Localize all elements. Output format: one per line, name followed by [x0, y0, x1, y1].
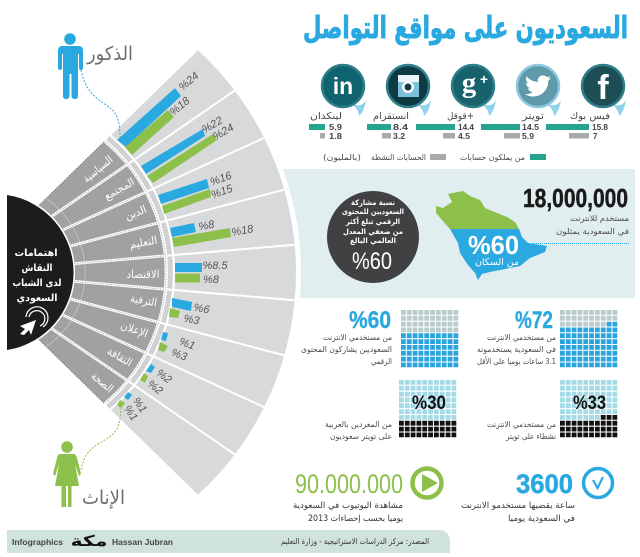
icon: google plus: [452, 65, 496, 116]
account bars: 3.2: [393, 132, 406, 141]
callout: digital content share: العالمي البالغ: [350, 236, 396, 245]
black hub: النقاش: [22, 263, 52, 274]
callout: digital content share: السعوديين للمحتوى: [342, 207, 404, 216]
stat: 30 percent: [325, 382, 457, 441]
account bars: 8.4: [393, 123, 409, 132]
female bars: [117, 110, 231, 408]
black hub: اهتمامات: [14, 248, 58, 259]
stat: 72 percent: من مستخدمي الانترنت: [487, 333, 556, 342]
percentage labels: %2: [154, 367, 174, 386]
stat: 72 percent: %72: [515, 307, 553, 334]
icon: facebook: [582, 65, 626, 116]
stat: 33 percent: نشطاء على تويتر: [505, 432, 556, 441]
callout: digital content share: من ضعفي المعدل: [343, 227, 403, 236]
percentage labels: %3: [170, 347, 189, 364]
stat: 60 percent: السعوديين يشاركون المحتوى: [301, 345, 392, 354]
icon: instagram: [387, 65, 431, 116]
category labels: الدين: [123, 203, 148, 223]
waffle chart 33: [560, 382, 618, 435]
waffle chart 60: [401, 312, 459, 365]
account bars: 14.5: [522, 123, 540, 132]
stat: hours per day: ساعة يقضيها مستخدمو الانترنت: [461, 501, 575, 511]
percentage labels: %8.5: [202, 260, 228, 272]
category labels: [80, 153, 160, 395]
icon: linkedin: [322, 65, 366, 116]
users caption: [556, 214, 629, 236]
icon: twitter: [517, 65, 561, 116]
stat: 60 percent: [301, 307, 459, 366]
callout: digital content share: [327, 191, 419, 283]
percentage labels: %8: [198, 219, 216, 233]
account bars: 1.8: [329, 132, 343, 141]
callout: digital content share: %60: [352, 248, 392, 275]
source: المصدر: مركز الدراسات الاستراتيجية - وزارة التعليم: [281, 537, 429, 546]
stat: 30 percent: %30: [412, 393, 446, 414]
icon: cursor: [20, 307, 48, 335]
percentage labels: %16: [209, 169, 234, 189]
category labels: السياسية: [80, 153, 115, 185]
percentage labels: %24: [211, 122, 236, 143]
network names: قوقل+: [447, 111, 474, 122]
stat: hours per day: في السعودية يوميا: [508, 514, 575, 524]
stat: 33 percent: من مستخدمي الانترنت: [487, 420, 556, 429]
users caption: في السعودية يمثلون: [556, 227, 629, 236]
map of Saudi Arabia: [436, 191, 547, 280]
credit: author: Hassan Jubran: [112, 538, 173, 547]
icon: facebook: f: [597, 69, 609, 107]
logo: مكة: [70, 532, 108, 550]
stat: youtube views: [293, 468, 442, 524]
outer fan: [111, 50, 296, 495]
stat: 72 percent: [477, 307, 618, 366]
network names: تويتر: [521, 111, 544, 122]
icon: clock: [584, 468, 612, 498]
stat: hours per day: [461, 468, 612, 524]
stat: 72 percent: في السعودية يستخدمونه: [477, 345, 556, 354]
male label: الذكور: [86, 43, 133, 65]
percentage labels: %18: [231, 223, 255, 239]
account bars: 4.5: [458, 132, 471, 141]
stat: youtube views: يوميا بحسب إحصاءات 2013: [308, 514, 404, 524]
icon: man: [58, 33, 83, 99]
percentage labels: %6: [193, 302, 211, 316]
percentage labels: %2: [145, 378, 165, 397]
legend: من يملكون حسابات: [460, 153, 525, 162]
stat: 33 percent: %33: [573, 393, 606, 414]
category labels: الترفية: [129, 292, 158, 309]
stat: hours per day: 3600: [516, 469, 573, 499]
icon: play: [412, 468, 442, 498]
map of Saudi Arabia: %60: [468, 230, 519, 260]
female label: الإناث: [82, 487, 125, 509]
percentage labels: %1: [130, 395, 149, 415]
percentage labels: %18: [168, 94, 193, 118]
account bars: 5.9: [522, 132, 535, 141]
female figure: [53, 408, 125, 509]
dashed connector male: [81, 70, 120, 137]
category labels: الصحة: [88, 369, 116, 395]
male bars: [117, 88, 209, 400]
category labels: التعليم: [128, 234, 158, 251]
network names: [310, 111, 610, 122]
percentage labels: %8: [203, 274, 220, 286]
footer bar: [7, 530, 450, 553]
users caption: مستخدم للانترنت: [570, 214, 629, 223]
percentage labels: %1: [121, 403, 140, 423]
waffle chart 72: [560, 312, 618, 365]
waffle chart 30: [399, 382, 457, 435]
legend: [323, 153, 546, 162]
stat: 60 percent: %60: [349, 307, 391, 334]
category labels: الثقافة: [105, 345, 135, 369]
dotted connector: [532, 242, 630, 244]
percentage labels: %22: [200, 115, 225, 136]
legend: الحسابات النشطة: [371, 153, 426, 162]
category labels: الإعلان: [119, 319, 150, 341]
percentage labels: %24: [177, 70, 201, 93]
account bars: 7: [593, 132, 598, 141]
credit: infographics: Infographics: [12, 538, 64, 547]
male figure: [58, 33, 133, 137]
callout: digital content share: نسبة مشاركة: [351, 198, 395, 207]
panel: social networks: [309, 65, 626, 162]
icon: google plus: g: [462, 67, 477, 99]
account bars: 15.8: [592, 123, 609, 132]
stat: 60 percent: من مستخدمي الانترنت: [323, 333, 392, 342]
icon: google plus: +: [480, 71, 488, 87]
dashed connector female: [81, 408, 121, 470]
account bars: 14.4: [458, 123, 475, 132]
stat: 30 percent: من المغردين بالعربية: [325, 420, 392, 429]
stat: 60 percent: الرقمي: [371, 357, 392, 366]
icon: linkedin: in: [333, 73, 353, 99]
icon: woman: [53, 441, 81, 507]
black hub: [7, 195, 74, 350]
legend: (بالمليون): [323, 153, 361, 162]
network names: لينكدان: [310, 111, 342, 122]
percentage labels: %3: [183, 313, 201, 327]
fan chart: [7, 50, 296, 495]
account bars: [309, 123, 609, 141]
black hub: لدى الشباب: [12, 278, 62, 289]
stat: 72 percent: ‏3.1 ساعات يوميا على الأقل: [477, 356, 556, 366]
stat: youtube views: مشاهدة اليوتيوب في السعودية: [293, 501, 403, 511]
map of Saudi Arabia: من السكان: [475, 257, 519, 268]
percentage labels: %1: [178, 336, 197, 353]
network names: فيس بوك: [570, 111, 610, 122]
percentage labels: [121, 70, 255, 423]
inner category ring: [39, 142, 165, 403]
account bars: 5.9: [329, 123, 343, 132]
percentage labels: %15: [210, 182, 235, 202]
stat: youtube views: 90.000.000: [295, 469, 403, 499]
stat: 30 percent: على تويتر سعوديون: [330, 432, 392, 441]
inner ring band: [108, 138, 170, 407]
black hub: السعودي: [16, 293, 58, 304]
category labels: الاقتصاد: [126, 268, 160, 281]
category labels: المجتمع: [102, 175, 137, 203]
callout: digital content share: الرقمي تبلغ أكثر: [345, 216, 400, 226]
network names: انستقرام: [373, 111, 409, 122]
stat: 33 percent: [487, 382, 618, 441]
